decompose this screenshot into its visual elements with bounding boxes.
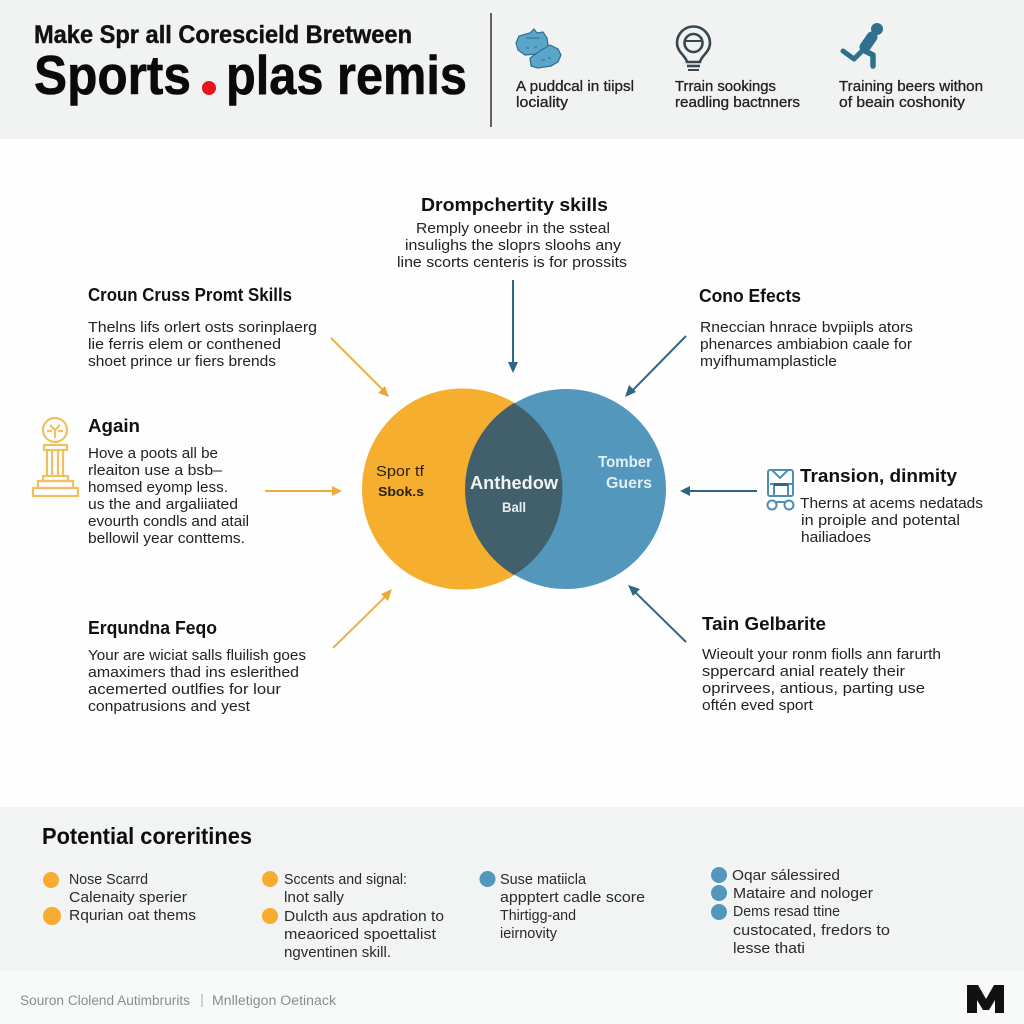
callout: lower left: Your are wiciat salls fluilish goes: [88, 648, 306, 664]
callout: upper left: shoet prince ur fiers brends: [88, 354, 276, 370]
label: intersection: Ball: [502, 499, 526, 515]
list column 3: [480, 871, 645, 942]
arrow: left: [265, 486, 342, 496]
callout: right: Therns at acems nedatads: [800, 496, 983, 512]
list column 2: meaoriced spoettalist: [284, 927, 436, 943]
callout: top: [397, 195, 627, 271]
feature: puddle icon and text: A puddcal in tiipsl: [516, 79, 634, 95]
title: Make Spr all Corescield Bretween: [34, 21, 412, 49]
callout: right: [800, 466, 983, 546]
list column 2: [262, 871, 444, 961]
header band: [0, 0, 1024, 139]
title: [34, 21, 467, 106]
label: right circle: Tomber: [598, 454, 652, 471]
list column 3: Suse matiicla: [500, 872, 587, 888]
callout: lower left: Erqundna Feqo: [88, 618, 217, 638]
list column 3: ieirnovity: [500, 926, 558, 942]
feature: puddle icon and text: lociality: [516, 95, 569, 111]
feature: light bulb icon and text: Trrain sookings: [675, 79, 776, 95]
list column 2: Sccents and signal:: [284, 872, 407, 888]
arrow: lower left: [333, 589, 392, 648]
label: right circle: Guers: [606, 475, 652, 492]
footer: [0, 971, 1024, 1024]
callout: top: insulighs the sloprs sloohs any: [405, 238, 622, 254]
list column 4: [711, 867, 890, 957]
callout: lower right: oprirvees, antious, parting use: [702, 681, 925, 697]
title: plas remis: [226, 44, 467, 106]
callout: lower right: oftén eved sport: [702, 698, 813, 714]
heading: Potential coreritines: [42, 823, 252, 849]
callout: upper right: myifhumamplasticle: [700, 354, 837, 370]
icon: light bulb: [677, 27, 710, 70]
callout: left: us the and argaliiated: [88, 497, 238, 513]
list column 4: Dems resad ttine: [733, 904, 840, 920]
feature: runner icon and text: Training beers withon: [839, 79, 983, 95]
callout: lower left: amaximers thad ins eslerithed: [88, 665, 299, 681]
callout: right: hailiadoes: [801, 530, 871, 546]
callout: left: rleaiton use a bsb–: [88, 463, 223, 479]
feature: runner icon and text: [839, 23, 983, 111]
list column 1: [43, 872, 196, 925]
list column 2: lnot sally: [284, 890, 345, 906]
callout: upper right: [699, 286, 913, 370]
feature: runner icon and text: of beain coshonity: [839, 95, 966, 111]
callout: lower right: Wieoult your ronm fiolls ann farurth: [702, 647, 941, 663]
list column 3: Thirtigg-and: [500, 908, 576, 924]
list column 4: lesse thati: [733, 941, 805, 957]
arrow: upper right: [625, 336, 686, 397]
list column 4: Mataire and nologer: [733, 886, 873, 902]
callout: upper right: phenarces ambiabion caale for: [700, 337, 912, 353]
feature: light bulb icon and text: [675, 27, 800, 111]
icon: golden column trophy: [33, 418, 78, 496]
callout: top: Remply oneebr in the ssteal: [416, 221, 610, 237]
label: left circle: Spor tf: [376, 463, 425, 480]
callout: lower right: sppercard anial reately their: [702, 664, 905, 680]
logo: [967, 985, 1004, 1013]
icon: blue blobs: [516, 29, 561, 68]
list column 1: Calenaity sperier: [69, 890, 187, 906]
callout: upper left: [88, 285, 317, 370]
label: intersection: Anthedow: [470, 473, 559, 493]
venn diagram: [362, 388, 666, 590]
list column 2: Dulcth aus apdration to: [284, 909, 444, 925]
callout: upper right: Cono Efects: [699, 286, 801, 306]
callout: upper left: Croun Cruss Promt Skills: [88, 285, 292, 305]
arrow: upper left: [331, 338, 389, 397]
callout: lower left: acemerted outlfies for lour: [88, 682, 281, 698]
list column 1: Rqurian oat thems: [69, 908, 196, 924]
feature: light bulb icon and text: readling bactnners: [675, 95, 800, 111]
callout: top: Drompchertity skills: [421, 195, 608, 215]
intersection: [465, 403, 562, 575]
list column 4: Oqar sálessired: [732, 868, 840, 884]
callout: right: in proiple and potental: [801, 513, 960, 529]
arrow: lower right: [628, 585, 686, 642]
icon: runner: [843, 23, 883, 66]
title: Sports: [34, 44, 191, 106]
callout: lower right: [702, 614, 941, 714]
callout: right: Transion, dinmity: [800, 466, 957, 486]
label: intersection: [470, 473, 559, 515]
label: left circle: Sbok.s: [378, 484, 424, 499]
footer: Mnlletigon Oetinack: [212, 993, 336, 1008]
list column 4: custocated, fredors to: [733, 923, 890, 939]
callout: lower right: Tain Gelbarite: [702, 614, 826, 634]
arrow: top: [508, 280, 518, 373]
callout: upper left: lie ferris elem or conthened: [88, 337, 281, 353]
panel: potential coreritines: [0, 807, 1024, 971]
callout: left: [88, 416, 249, 547]
arrow: right: [680, 486, 757, 496]
callout: upper left: Thelns lifs orlert osts sorinplaerg: [88, 320, 317, 336]
callout: left: evourth condls and atail: [88, 514, 249, 530]
callout: left: homsed eyomp less.: [88, 480, 228, 496]
label: left circle: [376, 463, 425, 499]
callout: lower left: conpatrusions and yest: [88, 699, 250, 715]
callout: left: Again: [88, 416, 140, 436]
callout: lower left: [88, 618, 306, 715]
list column 1: Nose Scarrd: [69, 872, 148, 888]
callout: left: Hove a poots all be: [88, 446, 218, 462]
label: right circle: [598, 454, 652, 492]
list column 3: appptert cadle score: [500, 890, 645, 906]
circle: blue: [466, 389, 666, 589]
feature: puddle icon and text: [516, 29, 634, 111]
callout: upper right: Rneccian hnrace bvpiipls ators: [700, 320, 913, 336]
list column 2: ngventinen skill.: [284, 945, 391, 961]
source text: Souron Clolend Autimbrurits: [20, 993, 190, 1008]
callout: left: bellowil year conttems.: [88, 531, 245, 547]
circle: orange: [362, 388, 563, 590]
callout: top: line scorts centeris is for prossits: [397, 255, 627, 271]
icon: transit vehicle: [768, 470, 794, 510]
